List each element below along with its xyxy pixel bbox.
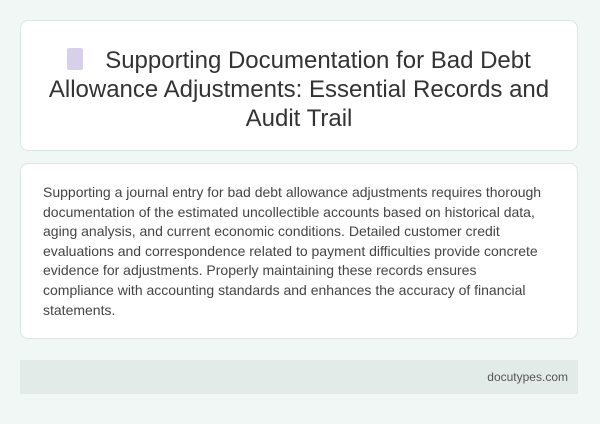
icon: document xyxy=(67,48,83,70)
footer text: docutypes.com xyxy=(487,370,568,384)
footer xyxy=(20,360,578,394)
text block: Supporting a journal entry for bad debt allowance adjustments requires thorough documentation of the estimated uncollectible accounts based on historical data, aging analysis, and current economic conditions. Detailed customer credit evaluations and correspondence related to payment difficulties provide concrete evidence for adjustments. Properly maintaining these records ensures compliance with accounting standards and enhances the accuracy of financial statements. xyxy=(43,184,541,318)
panel: title xyxy=(20,20,578,151)
panel: description xyxy=(20,163,578,339)
title: Supporting Documentation for Bad Debt Allowance Adjustments: Essential Records and Audit Trail xyxy=(49,47,549,132)
